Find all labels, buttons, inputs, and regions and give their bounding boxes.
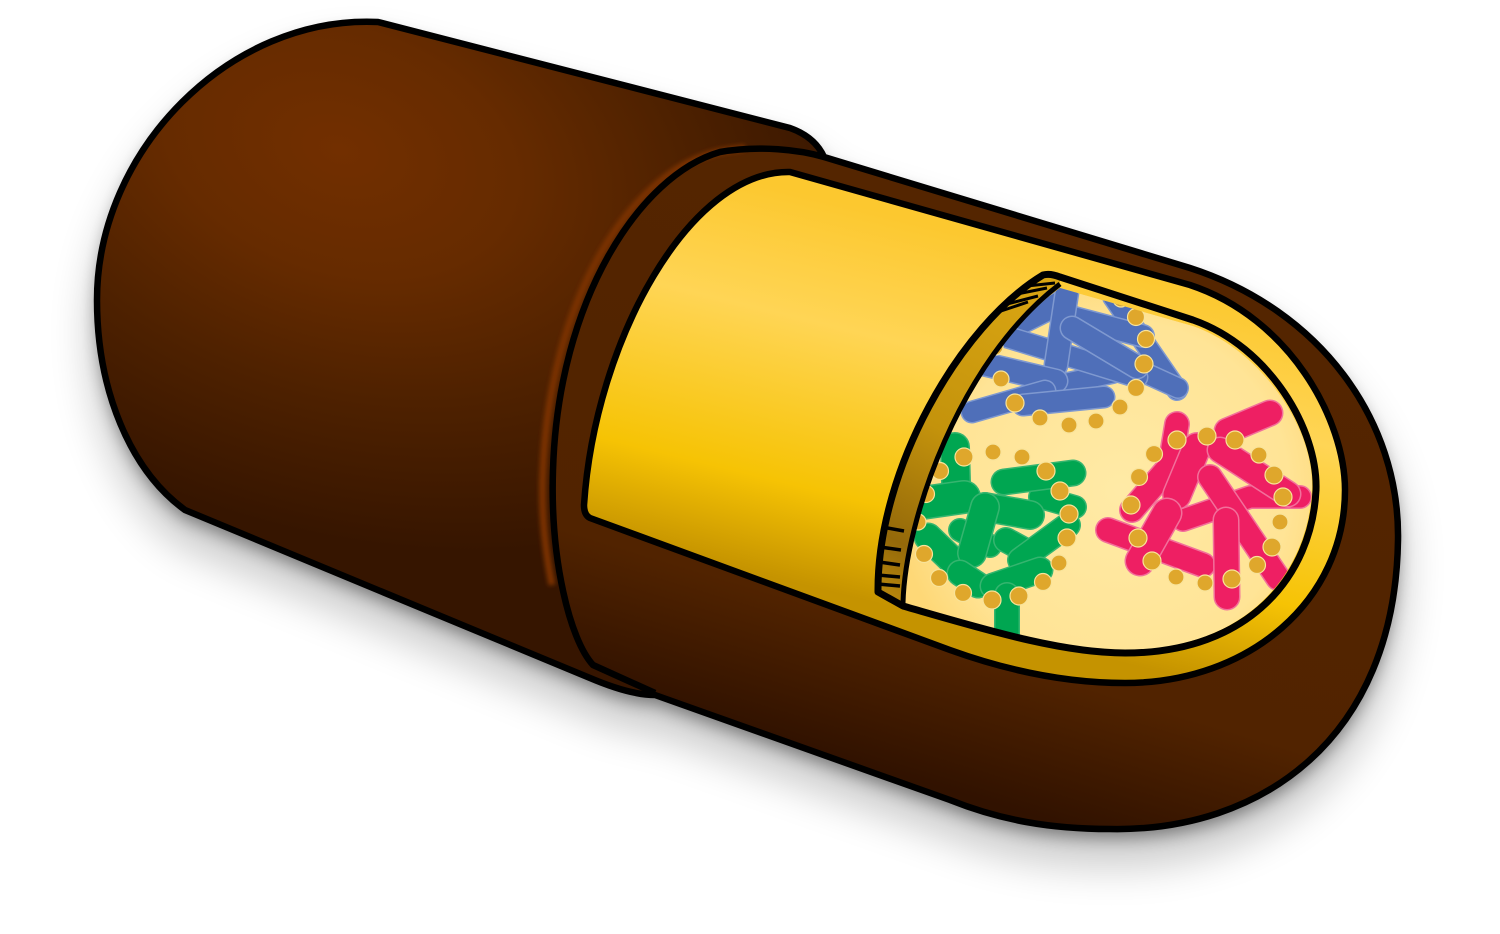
blue bacteria cluster — [972, 285, 1178, 412]
black outline of cavity — [878, 274, 1316, 653]
gold prebiotic dots — [910, 291, 1292, 609]
yellow cutaway window in shell — [584, 172, 1345, 683]
capsule outline — [97, 22, 1398, 829]
seam line between capsule halves — [553, 149, 824, 693]
green bacteria cluster — [922, 447, 1075, 645]
pink bacteria cluster — [1108, 413, 1300, 597]
capsule lower half, overlapping sleeve — [553, 149, 1398, 829]
orange glow along seam — [542, 148, 745, 585]
soft drop shadow under capsule — [97, 52, 1398, 859]
tight contact shadow — [97, 31, 1398, 838]
cream interior with bacteria — [903, 285, 1312, 650]
capsule body outer shell — [97, 22, 1398, 829]
inner cavity rim with ticks — [877, 275, 1060, 603]
